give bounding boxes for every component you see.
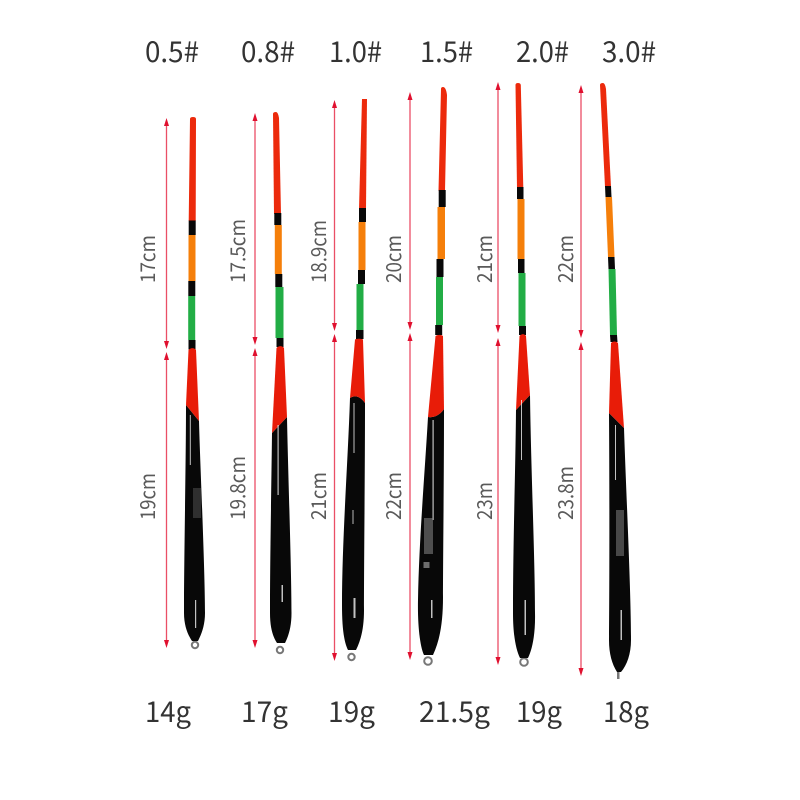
float column: 0.5# [131,117,205,648]
dimension arrow: lower [332,334,337,661]
size headings row [145,30,656,71]
dimension arrow: upper [252,113,258,345]
dimension arrow: lower [252,348,258,648]
label: 22cm: 22cm [377,472,407,520]
weight labels row: 14g [145,690,191,731]
weight labels row: 18g [603,690,649,731]
size headings row: 1.0# [329,30,382,71]
float 2.0# [513,83,535,666]
label: 22cm: 22cm [549,235,579,283]
float 0.5# [184,117,205,648]
label: 17.5cm: 17.5cm [221,219,251,283]
label: 19cm: 19cm [131,473,161,520]
label: 19.8cm: 19.8cm [221,456,251,520]
size headings row: 3.0# [602,30,656,71]
dimension arrow: upper [496,82,500,333]
float column: 0.8# [221,112,292,653]
dimension arrow: lower [164,352,169,648]
weight labels row: 17g [241,690,288,731]
weight labels row: 19g [516,690,562,731]
float 1.0# [342,99,367,660]
weight labels row [145,690,649,731]
label: 21cm: 21cm [302,472,332,520]
weight labels row: 19g [328,690,375,731]
float 3.0# [600,83,631,679]
float 0.8# [270,112,292,653]
float column: 1.5# [377,87,447,665]
size headings row: 0.8# [241,30,295,71]
dimension arrow: lower [408,333,412,660]
size headings row: 1.5# [420,30,473,71]
weight labels row: 21.5g [419,690,490,731]
dimension arrow: upper [332,100,337,331]
label: 23m: 23m [468,482,498,520]
float 1.5# [418,87,447,665]
dimension arrow: lower [578,342,584,676]
label: 23.8m: 23.8m [549,466,579,520]
dimension arrow: lower [496,338,500,665]
label: 21cm: 21cm [468,235,498,283]
label: 18.9cm: 18.9cm [302,220,332,283]
dimension arrow: upper [164,118,169,349]
float column: 1.0# [302,99,367,661]
size headings row: 2.0# [516,30,569,71]
size headings row: 0.5# [145,30,199,71]
float column: 3.0# [549,83,631,679]
label: 20cm: 20cm [377,235,407,283]
float column: 2.0# [468,82,535,666]
dimension arrow: upper [408,92,412,330]
label: 17cm: 17cm [131,235,161,283]
dimension arrow: upper [578,85,584,338]
